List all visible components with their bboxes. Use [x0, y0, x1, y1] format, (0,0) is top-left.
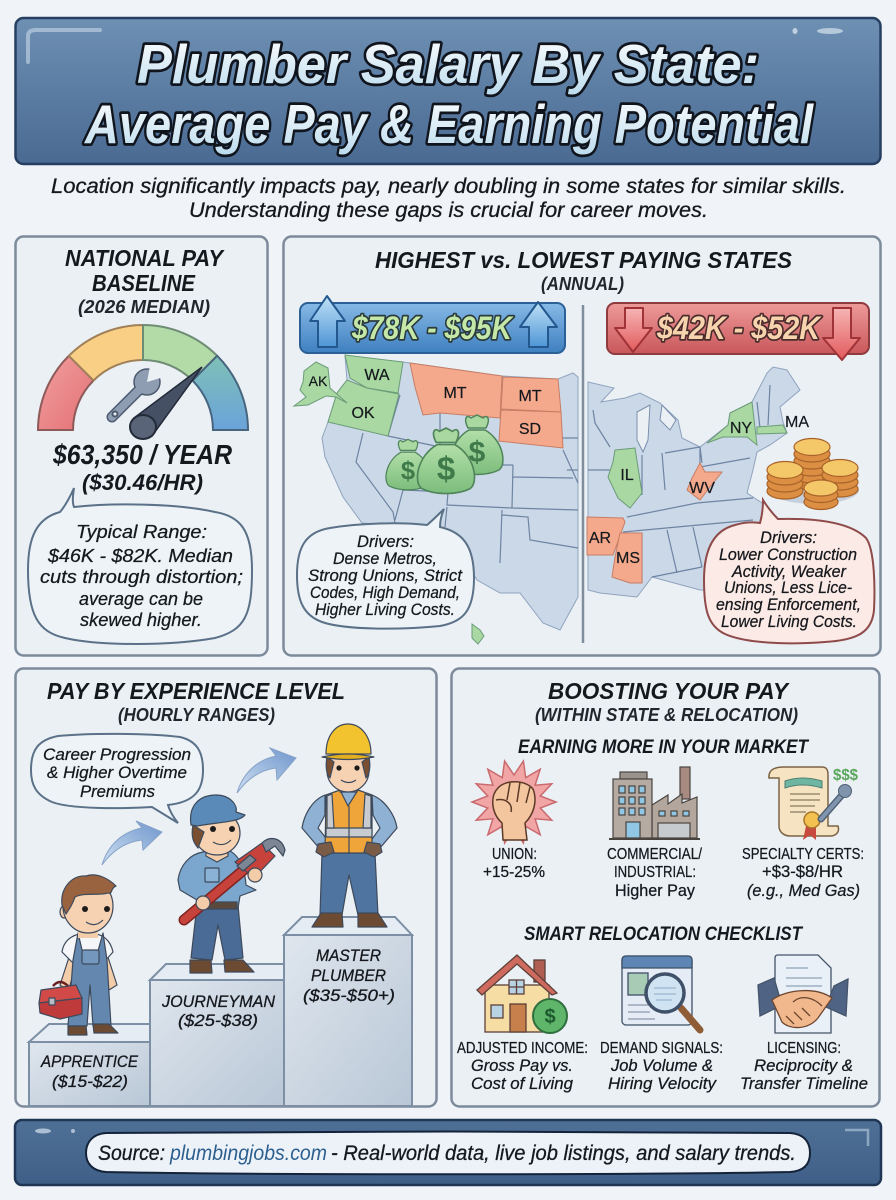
callout: typical range: average can be	[79, 589, 203, 609]
state: AR	[587, 517, 625, 555]
source pill: plumbingjobs.com	[169, 1142, 327, 1165]
licensing label: Reciprocity &	[754, 1057, 853, 1075]
range value: $78K - $95K	[351, 310, 515, 346]
state: MA: MA	[785, 414, 809, 431]
icon: coin stacks	[767, 438, 859, 510]
icon: money bag left	[386, 439, 430, 490]
callout: high pay drivers: Strong Unions, Strict	[308, 567, 463, 585]
specialty certs label	[742, 846, 864, 900]
union label: UNION:	[492, 846, 537, 863]
union label: +15-25%	[483, 864, 545, 881]
panel: highest vs lowest paying states	[15, 236, 881, 1185]
icon: down arrow left	[615, 308, 652, 352]
union label	[483, 846, 545, 881]
commercial label: Higher Pay	[615, 882, 696, 900]
state: MT east: MT	[518, 388, 542, 405]
source pill: Source:	[98, 1142, 165, 1165]
demand signals label: DEMAND SIGNALS:	[600, 1040, 723, 1057]
state: OK: OK	[351, 405, 375, 422]
dollar signs: $$$	[833, 767, 858, 784]
panel heading: NATIONAL PAY	[65, 245, 226, 271]
demand signals label	[600, 1040, 723, 1093]
callout: career progression: & Higher Overtime	[47, 764, 187, 782]
figure: master plumber	[302, 724, 397, 927]
icon: red toolbox	[39, 982, 82, 1019]
callout: high pay drivers: Drivers:	[357, 533, 414, 551]
podium step: master plumber	[284, 917, 412, 1106]
icon: money bag right	[451, 415, 503, 474]
state: NY	[707, 402, 757, 445]
source pill: - Real-world data, live job listings, and salary trends.	[331, 1142, 796, 1165]
intro text: Location significantly impacts pay, nearly doubling in some states for similar skills.	[51, 175, 846, 198]
divider	[582, 305, 584, 643]
state: SD	[499, 410, 563, 448]
arrow: apprentice to journeyman	[102, 821, 162, 865]
podium step: master plumber: PLUMBER	[311, 966, 386, 985]
callout: low pay drivers: Drivers:	[760, 529, 817, 547]
title banner	[16, 18, 880, 164]
icon: up arrow left	[310, 296, 345, 347]
callout: low pay drivers: Activity, Weaker	[731, 563, 847, 581]
panel heading: (ANNUAL)	[541, 274, 624, 294]
callout: typical range: cuts through distortion;	[40, 567, 243, 587]
panel heading: (HOURLY RANGES)	[118, 705, 275, 725]
panel heading	[535, 678, 798, 725]
callout: high pay drivers	[297, 509, 474, 629]
icon: union fist	[472, 761, 556, 843]
intro text	[51, 175, 846, 222]
icon: house with dollar coin	[477, 955, 567, 1033]
callout: career progression: Premiums	[80, 783, 155, 801]
panel heading: HIGHEST vs. LOWEST PAYING STATES	[375, 247, 793, 273]
map: western US, highest paying states	[294, 355, 578, 630]
icon: down arrow right	[823, 308, 860, 360]
callout: typical range: skewed higher.	[80, 610, 202, 630]
callout: typical range: $46K - $82K. Median	[47, 546, 233, 566]
title line 1: Plumber Salary By State:	[137, 33, 759, 95]
gauge chart	[38, 325, 248, 439]
adjusted income label: Gross Pay vs.	[471, 1057, 573, 1075]
state: IL: IL	[620, 467, 634, 484]
callout: low pay drivers: ensing Enforcement,	[716, 596, 861, 614]
banner: lowest pay range	[607, 303, 869, 360]
podium step: journeyman: JOURNEYMAN	[161, 992, 276, 1011]
hourly pay figure: ($30.46/HR)	[82, 470, 203, 495]
icon: wrench	[112, 366, 164, 417]
callout: high pay drivers: Higher Living Costs.	[315, 601, 455, 619]
icon: document and handshake	[758, 955, 848, 1033]
panel heading: (WITHIN STATE & RELOCATION)	[535, 705, 798, 725]
state: WA: WA	[364, 367, 390, 384]
subheading: earning more: EARNING MORE IN YOUR MARKET	[518, 737, 809, 758]
panel heading: PAY BY EXPERIENCE LEVEL	[47, 678, 345, 704]
icon: hard hat	[322, 724, 374, 760]
adjusted income label	[457, 1040, 588, 1093]
figure: journeyman	[178, 795, 285, 973]
specialty certs label: SPECIALTY CERTS:	[742, 846, 864, 863]
figure: apprentice	[39, 875, 118, 1035]
podium step: master plumber: ($35-$50+)	[303, 986, 395, 1005]
state: AK: AK	[309, 373, 328, 389]
panel heading	[375, 247, 793, 294]
podium step: journeyman: ($25-$38)	[178, 1011, 258, 1030]
intro text: Understanding these gaps is crucial for career moves.	[189, 199, 708, 222]
state: MT: MT	[443, 385, 467, 402]
state: MA	[757, 414, 809, 434]
icon: money bag right: $	[469, 436, 486, 469]
licensing label: Transfer Timeline	[740, 1075, 868, 1093]
icon: commercial and industrial buildings	[609, 767, 700, 839]
state: AK	[294, 362, 347, 406]
arrow: journeyman to master	[237, 748, 296, 793]
state: WV: WV	[689, 480, 715, 497]
callout: low pay drivers: Unions, Less Lice-	[724, 579, 852, 597]
panel: pay by experience level	[16, 668, 436, 1106]
adjusted income label: Cost of Living	[471, 1075, 574, 1093]
callout: career progression	[31, 734, 203, 823]
panel heading: BASELINE	[92, 270, 196, 296]
icon: house with dollar coin: $	[544, 1006, 556, 1028]
small island	[472, 624, 484, 644]
callout: low pay drivers: Lower Living Costs.	[721, 613, 857, 631]
range value: $42K - $52K	[656, 310, 823, 346]
callout: typical range	[28, 488, 252, 644]
subheading: relocation checklist: SMART RELOCATION CHECKLIST	[524, 924, 803, 945]
panel heading	[47, 678, 345, 725]
demand signals label: Job Volume &	[610, 1057, 713, 1075]
specialty certs label: (e.g., Med Gas)	[747, 882, 860, 900]
callout: high pay drivers: Dense Metros,	[333, 550, 437, 568]
state: WV	[687, 463, 722, 500]
state: SD: SD	[519, 421, 541, 438]
icon: money bag centre: $	[437, 450, 455, 487]
demand signals label: Hiring Velocity	[608, 1075, 718, 1093]
specialty certs label: +$3-$8/HR	[762, 863, 843, 881]
podium step: master plumber: MASTER	[316, 946, 381, 965]
icon: money bag centre	[417, 428, 475, 494]
panel heading	[65, 245, 226, 317]
panel heading: (2026 MEDIAN)	[78, 297, 210, 317]
licensing label: LICENSING:	[767, 1040, 841, 1057]
icon: up arrow right	[520, 302, 557, 347]
icon: pipe wrench	[184, 839, 285, 920]
commercial label: COMMERCIAL/	[607, 846, 703, 863]
licensing label	[740, 1040, 868, 1093]
panel: boosting your pay	[452, 668, 880, 1106]
state: MT east	[501, 377, 561, 412]
banner: highest pay range	[300, 296, 565, 353]
commercial label	[607, 846, 703, 900]
state: WA	[345, 355, 403, 393]
source pill	[86, 1132, 810, 1174]
state: IL	[608, 448, 642, 508]
icon: specialty certificate	[769, 767, 858, 840]
map: eastern US, lowest paying states	[297, 296, 874, 643]
footer banner	[15, 1120, 881, 1185]
podium step: journeyman	[150, 964, 284, 1106]
callout: low pay drivers	[704, 500, 874, 643]
panel heading: BOOSTING YOUR PAY	[548, 678, 791, 704]
state: MT	[410, 363, 502, 418]
annual pay figure: $63,350 / YEAR	[52, 439, 233, 470]
callout: low pay drivers: Lower Construction	[719, 546, 857, 564]
icon: money bag left: $	[401, 457, 415, 485]
callout: career progression: Career Progression	[43, 746, 191, 764]
podium step: apprentice	[29, 1024, 150, 1106]
callout: high pay drivers: Codes, High Demand,	[310, 584, 460, 602]
podium step: apprentice: ($15-$22)	[52, 1072, 128, 1091]
adjusted income label: ADJUSTED INCOME:	[457, 1040, 588, 1057]
state: NY: NY	[730, 420, 752, 437]
state: AR: AR	[589, 530, 611, 547]
state: OK	[328, 380, 399, 436]
gauge needle	[130, 367, 202, 439]
icon: job listings under magnifier	[622, 956, 700, 1030]
state: MS: MS	[616, 550, 640, 567]
callout: typical range: Typical Range:	[76, 522, 207, 542]
podium step: apprentice: APPRENTICE	[40, 1052, 139, 1071]
state: MS	[612, 533, 642, 583]
commercial label: INDUSTRIAL:	[614, 864, 696, 881]
panel: national pay baseline	[16, 236, 268, 656]
